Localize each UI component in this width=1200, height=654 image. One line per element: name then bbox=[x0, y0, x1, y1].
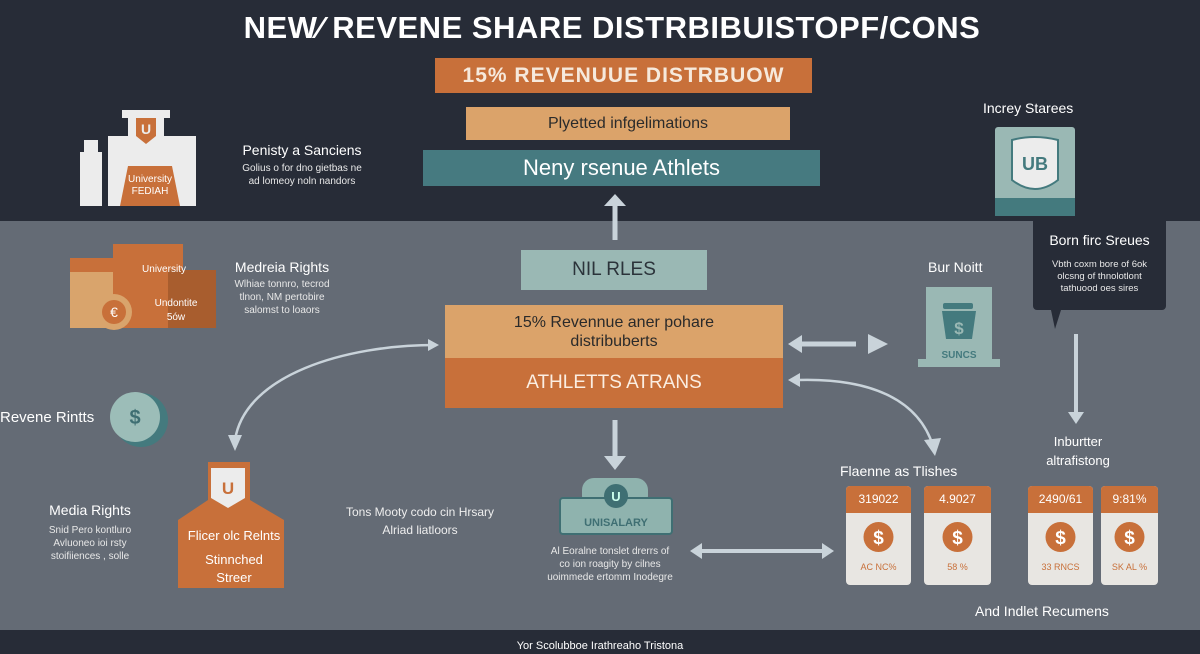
cards bbox=[846, 486, 1158, 585]
orange section bbox=[445, 358, 783, 408]
teal bar bbox=[423, 150, 820, 186]
card 2: 58 % bbox=[947, 562, 968, 572]
text: media rights: Snid Pero kontluro bbox=[49, 525, 131, 536]
card 1 bbox=[846, 486, 911, 585]
text: media rights: stoifiiences , solle bbox=[51, 551, 129, 562]
card 3: 2490/61 bbox=[1039, 492, 1082, 506]
icon: media rights stack: 5ów bbox=[167, 312, 186, 323]
icon: media rights stack: Undontite bbox=[155, 298, 198, 309]
orange bar: 15% REVENUUE DISTRBUOW bbox=[463, 64, 784, 87]
card 4 bbox=[1101, 486, 1158, 585]
text: medreia rights: salomst to loaors bbox=[244, 305, 320, 316]
icon: media rights stack bbox=[70, 244, 216, 330]
orange bar bbox=[435, 58, 812, 93]
icon: money bag bbox=[918, 287, 1000, 367]
double arrow bottom bbox=[690, 543, 834, 559]
text: house: Streer bbox=[216, 570, 252, 585]
tan section: distribuberts bbox=[570, 333, 658, 350]
icon: castle university bbox=[80, 110, 196, 206]
double arrows center right bbox=[788, 334, 888, 354]
text: penisty: Golius o for dno gietbas ne bbox=[242, 163, 362, 174]
text: center bottom: co ion roagity by cilnes bbox=[559, 559, 661, 570]
teal bar: Neny rsenue Athlets bbox=[523, 155, 720, 180]
tan bar bbox=[466, 107, 790, 140]
icon: university money bbox=[559, 478, 673, 535]
text: media rights: Media Rights bbox=[49, 502, 131, 518]
vertical arrow right bbox=[1068, 334, 1084, 424]
icon: media rights stack: University bbox=[142, 264, 186, 275]
text: and indlet: And Indlet Recumens bbox=[975, 603, 1109, 619]
icon: UB badge bbox=[995, 127, 1075, 216]
card 1: $ bbox=[873, 528, 884, 549]
text: penisty: ad lomeoy noln nandors bbox=[249, 176, 355, 187]
text: tons mooty: Alriad liatloors bbox=[382, 523, 458, 537]
text: penisty bbox=[242, 142, 362, 187]
text: medreia rights bbox=[234, 259, 330, 316]
card 3: 33 RNCS bbox=[1041, 562, 1080, 572]
icon: university money: UNISALARY bbox=[584, 517, 649, 529]
text: center bottom bbox=[547, 546, 673, 583]
text: house: Stinnched bbox=[205, 552, 263, 567]
title: NEW⁄ REVENE SHARE DISTRBIBUISTOPF/CONS bbox=[244, 10, 980, 45]
text: center bottom: uoimmede ertomm Inodegre bbox=[547, 572, 673, 583]
orange house box bbox=[178, 462, 284, 588]
card 2: 4.9027 bbox=[939, 492, 976, 506]
arrow up bbox=[604, 194, 626, 240]
arrow down bbox=[604, 420, 626, 470]
card 1: AC NC% bbox=[860, 562, 896, 572]
text: center bottom: Al Eoralne tonslet drerrs of bbox=[551, 546, 669, 557]
curved arrow right bbox=[788, 373, 941, 456]
card 1: 319022 bbox=[858, 492, 899, 506]
icon: castle university: FEDIAH bbox=[132, 186, 168, 197]
text: tons mooty: Tons Mooty codo cin Hrsary bbox=[346, 505, 494, 519]
card 2 bbox=[924, 486, 991, 585]
text: inburtter bbox=[1046, 434, 1110, 468]
text: media rights bbox=[49, 502, 131, 562]
NIL box: NIL RLES bbox=[572, 259, 656, 280]
tan section bbox=[445, 305, 783, 358]
icon: money bag: $ bbox=[954, 319, 964, 338]
card 4: SK AL % bbox=[1112, 562, 1147, 572]
speech bubble: Born firc Sreues bbox=[1049, 232, 1150, 248]
text: medreia rights: Wlhiae tonnro, tecrod bbox=[234, 279, 330, 290]
text: increy starees: Increy Starees bbox=[983, 100, 1073, 116]
tan bar: Plyetted infgelimations bbox=[548, 115, 708, 132]
text: house bbox=[188, 528, 280, 585]
tan section: 15% Revennue aner pohare bbox=[514, 314, 714, 331]
icon: UB badge: UB bbox=[1022, 154, 1048, 174]
orange section: ATHLETTS ATRANS bbox=[526, 372, 702, 393]
center box bbox=[445, 305, 783, 408]
text: bur noitt: Bur Noitt bbox=[928, 259, 982, 275]
speech bubble: olcsng of thnolotlont bbox=[1057, 271, 1142, 282]
card 3 bbox=[1028, 486, 1093, 585]
text: inburtter: altrafistong bbox=[1046, 453, 1110, 468]
text: flaenne: Flaenne as Tlishes bbox=[840, 463, 957, 479]
text: revene rintts: Revene Rintts bbox=[0, 409, 94, 426]
card 4: 9:81% bbox=[1112, 492, 1147, 506]
icon: coin bbox=[110, 392, 168, 447]
text: house: Flicer olc Relnts bbox=[188, 528, 280, 543]
orange house box: U bbox=[222, 479, 234, 498]
card 4: $ bbox=[1124, 528, 1135, 549]
text: media rights: Avluoneo ioi rsty bbox=[53, 538, 127, 549]
speech bubble bbox=[1033, 221, 1166, 329]
icon: coin: $ bbox=[129, 407, 141, 429]
icon: castle university: U bbox=[141, 121, 151, 137]
curved arrow left bbox=[228, 339, 439, 451]
icon: castle university: University bbox=[128, 174, 172, 185]
speech bubble: Vbth coxm bore of 6ok bbox=[1052, 259, 1147, 270]
footer text: Yor Scolubboe Irathreaho Tristona bbox=[517, 640, 683, 652]
speech bubble: tathuood oes sires bbox=[1061, 283, 1138, 294]
text: medreia rights: tlnon, NM pertobire bbox=[239, 292, 325, 303]
icon: media rights stack: € bbox=[110, 304, 118, 320]
text: penisty: Penisty a Sanciens bbox=[242, 142, 362, 158]
text: inburtter: Inburtter bbox=[1054, 434, 1102, 449]
text: medreia rights: Medreia Rights bbox=[235, 259, 329, 275]
icon: university money: U bbox=[611, 489, 621, 504]
text: tons mooty bbox=[346, 505, 494, 537]
icon: money bag: SUNCS bbox=[941, 350, 977, 361]
card 2: $ bbox=[952, 528, 963, 549]
NIL box bbox=[521, 250, 707, 290]
card 3: $ bbox=[1055, 528, 1066, 549]
